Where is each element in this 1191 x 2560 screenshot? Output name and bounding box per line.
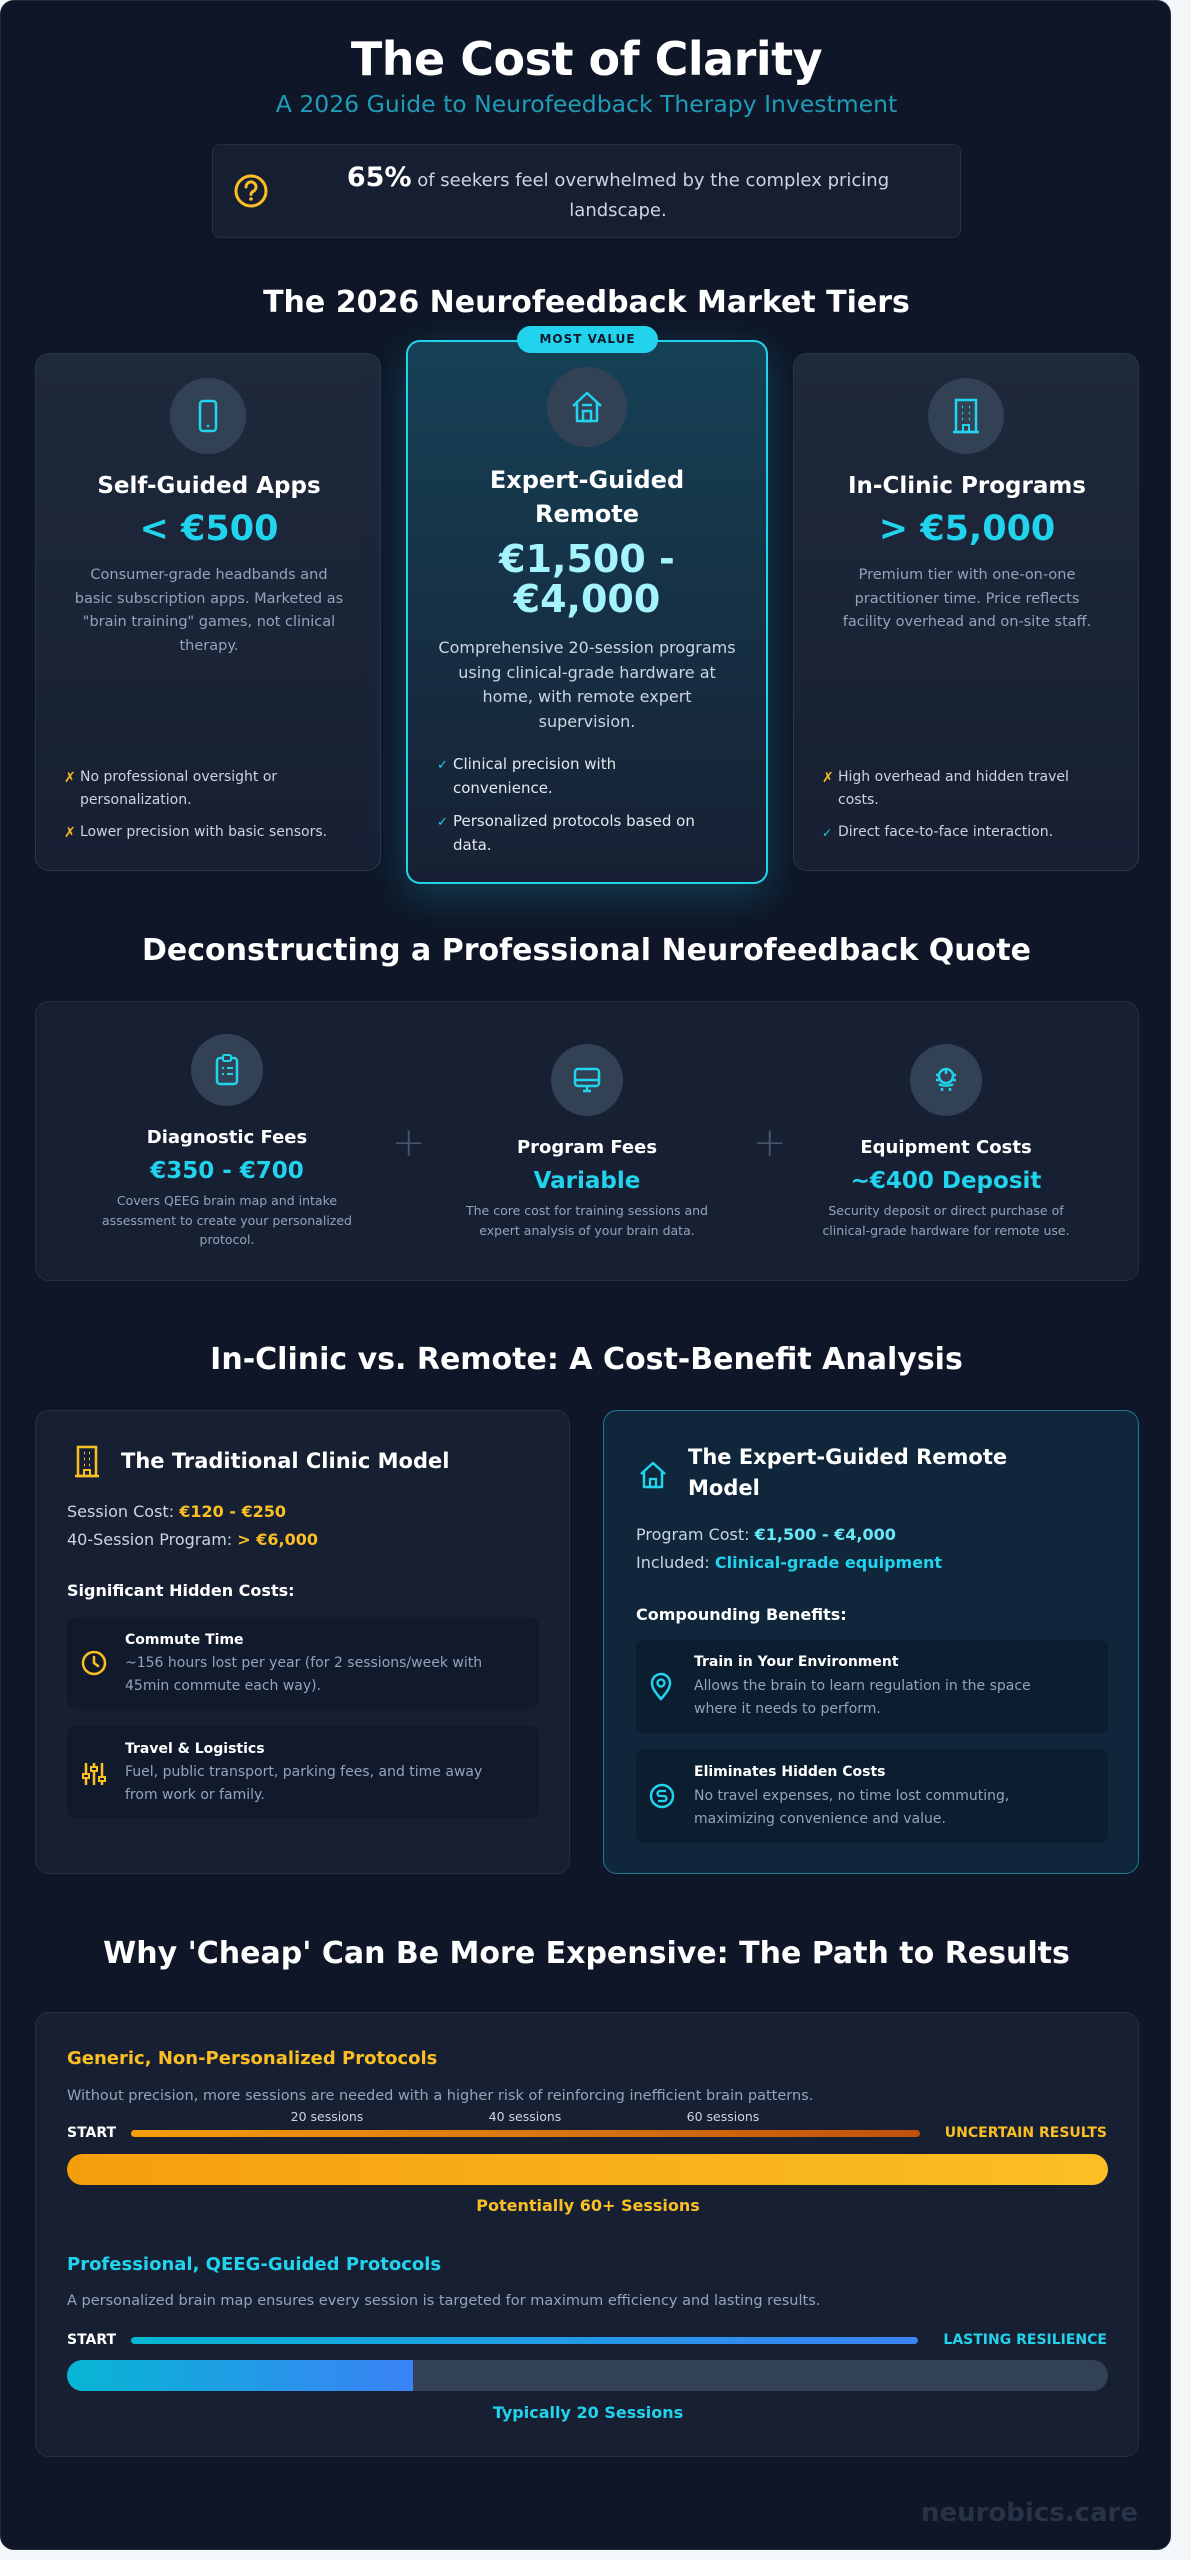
panel: traditional clinic <box>35 1410 570 1874</box>
cost lines <box>636 1525 942 1572</box>
cost lines: 40-Session Program: > €6,000 <box>67 1530 318 1549</box>
panel: path comparison: A personalized brain map ensures every session is targeted for maximum efficiency and lasting results. <box>67 2293 820 2309</box>
item: travel & logistics: Fuel, public transport, parking fees, and time away <box>125 1764 482 1780</box>
column: program fees: Variable <box>534 1168 640 1194</box>
icon: monitor <box>551 1044 623 1116</box>
column: program fees <box>466 1044 708 1238</box>
session markers: 20 sessions <box>291 2109 363 2124</box>
description: using clinical-grade hardware at <box>458 663 716 682</box>
bullets: ✗ <box>64 825 76 841</box>
cost lines: Program Cost: €1,500 - €4,000 <box>636 1525 896 1544</box>
column: equipment costs: Security deposit or direct purchase of <box>828 1203 1064 1218</box>
column: diagnostic fees: Diagnostic Fees <box>147 1127 307 1148</box>
item: commute time: ~156 hours lost per year (for 2 sessions/week with <box>125 1655 482 1671</box>
cost lines <box>67 1502 318 1549</box>
column: diagnostic fees <box>102 1034 352 1247</box>
icon: phone <box>170 378 246 454</box>
heading: market tiers: The 2026 Neurofeedback Market Tiers <box>263 285 910 320</box>
bullets: convenience. <box>453 779 553 797</box>
professional protocols: Professional, QEEG-Guided Protocols <box>67 2254 441 2275</box>
price: > €5,000 <box>879 509 1055 549</box>
icon: building yellow <box>75 1446 99 1478</box>
column: diagnostic fees: assessment to create your personalized <box>102 1212 352 1228</box>
description: Consumer-grade headbands and <box>90 567 328 583</box>
column: equipment costs <box>822 1044 1070 1238</box>
item: train in environment: where it needs to perform. <box>694 1701 881 1717</box>
description <box>75 567 343 654</box>
icon: headset <box>910 1044 982 1116</box>
price: €1,500 - <box>499 537 675 581</box>
bar: 60+ sessions <box>67 2154 1108 2185</box>
panel: path comparison <box>35 2012 1139 2457</box>
heading: The Expert-Guided Remote <box>688 1445 1007 1469</box>
card title: Expert-Guided <box>490 466 684 494</box>
cost lines: Session Cost: €120 - €250 <box>67 1502 286 1521</box>
bullets: Clinical precision with <box>453 755 616 773</box>
item: eliminates hidden costs: No travel expenses, no time lost commuting, <box>694 1788 1009 1804</box>
subtitle: A 2026 Guide to Neurofeedback Therapy Investment <box>276 90 897 118</box>
heading: The Traditional Clinic Model <box>121 1449 449 1473</box>
description: Premium tier with one-on-one <box>859 567 1075 583</box>
cost lines: Included: Clinical-grade equipment <box>636 1553 942 1572</box>
bullets: ✗ <box>822 770 834 786</box>
panel: in-clinic programs <box>793 353 1139 871</box>
icon: clipboard <box>191 1034 263 1106</box>
timeline: professional: START <box>67 2332 116 2348</box>
bullets: Direct face-to-face interaction. <box>838 824 1053 840</box>
column: diagnostic fees: protocol. <box>200 1232 254 1247</box>
icon: house <box>640 1462 666 1488</box>
description: Comprehensive 20-session programs <box>438 638 736 657</box>
bullets: personalization. <box>80 792 192 808</box>
bullets <box>822 769 1069 840</box>
description: basic subscription apps. Marketed as <box>75 590 343 606</box>
column: diagnostic fees: €350 - €700 <box>150 1158 304 1184</box>
item: commute time: Commute Time <box>125 1632 244 1648</box>
bullets: No professional oversight or <box>80 769 277 785</box>
generic protocols: Generic, Non-Personalized Protocols <box>67 2048 437 2069</box>
stat callout <box>212 144 961 238</box>
title: The Cost of Clarity <box>351 32 822 86</box>
item: eliminates hidden costs <box>636 1749 1108 1843</box>
column: program fees: expert analysis of your brain data. <box>479 1222 695 1238</box>
item: commute time <box>67 1617 539 1709</box>
card title: Remote <box>535 500 639 528</box>
heading: Model <box>688 1476 760 1500</box>
card title: In-Clinic Programs <box>848 473 1086 499</box>
bullets: Lower precision with basic sensors. <box>80 824 327 840</box>
description: "brain training" games, not clinical <box>83 614 335 630</box>
column: equipment costs: clinical-grade hardware for remote use. <box>822 1222 1070 1238</box>
bullets <box>437 755 695 854</box>
price: €4,000 <box>514 577 660 621</box>
timeline: generic: START <box>67 2125 116 2141</box>
stat text: landscape. <box>569 200 667 221</box>
bar: 20 sessions <box>67 2360 1108 2391</box>
subheading: Significant Hidden Costs: <box>67 1581 295 1600</box>
description: home, with remote expert <box>482 687 692 706</box>
price: < €500 <box>140 509 278 549</box>
panel: path comparison: UNCERTAIN RESULTS <box>945 2125 1107 2141</box>
subheading: Compounding Benefits: <box>636 1605 847 1624</box>
panel: quote breakdown <box>35 1001 1139 1281</box>
icon: question <box>234 174 268 208</box>
bullets: ✓ <box>437 815 448 830</box>
bullets: data. <box>453 836 492 854</box>
plus sign: + <box>392 1120 426 1166</box>
plus sign: + <box>753 1120 787 1166</box>
description <box>438 638 736 731</box>
column: equipment costs: ~€400 Deposit <box>851 1168 1041 1194</box>
badge: most value <box>517 326 658 353</box>
description <box>843 567 1091 630</box>
bullets: ✓ <box>437 758 448 773</box>
panel: expert-guided remote <box>406 340 768 884</box>
column: program fees: Program Fees <box>517 1137 657 1158</box>
item: travel & logistics: from work or family. <box>125 1787 265 1803</box>
description: therapy. <box>180 638 238 654</box>
panel: path comparison: Without precision, more sessions are needed with a higher risk of reinforcing inefficient brain patterns. <box>67 2088 813 2104</box>
price <box>498 537 675 621</box>
panel: path comparison: Typically 20 Sessions <box>493 2403 683 2422</box>
item: eliminates hidden costs: Eliminates Hidden Costs <box>694 1764 886 1780</box>
item: travel & logistics: Travel & Logistics <box>125 1741 265 1757</box>
footer brand: neurobics.care <box>921 2498 1138 2528</box>
stat text: 65% of seekers feel overwhelmed by the complex pricing <box>347 162 889 193</box>
bullets: ✓ <box>822 826 832 840</box>
item: commute time: 45min commute each way). <box>125 1678 321 1694</box>
item: travel & logistics <box>67 1726 539 1818</box>
item: train in environment: Train in Your Environment <box>694 1654 899 1670</box>
column: diagnostic fees: Covers QEEG brain map and intake <box>117 1193 337 1208</box>
badge: most value: MOST VALUE <box>539 332 636 346</box>
panel: path comparison: 40 sessions <box>489 2109 561 2124</box>
item: eliminates hidden costs: maximizing convenience and value. <box>694 1811 946 1827</box>
panel: path comparison: 60 sessions <box>687 2109 759 2124</box>
item: train in environment: Allows the brain to learn regulation in the space <box>694 1678 1031 1694</box>
description: supervision. <box>539 712 635 731</box>
panel: self-guided apps <box>35 353 381 871</box>
column: equipment costs: Equipment Costs <box>860 1137 1032 1158</box>
heading: path to results: Why 'Cheap' Can Be More Expensive: The Path to Results <box>103 1936 1070 1971</box>
card title: Self-Guided Apps <box>97 473 321 499</box>
panel: path comparison: LASTING RESILIENCE <box>943 2332 1107 2348</box>
bullets <box>64 769 327 841</box>
bullets: ✗ <box>64 770 76 786</box>
heading <box>688 1445 1007 1500</box>
column: program fees: The core cost for training sessions and <box>466 1203 708 1218</box>
icon: building <box>928 378 1004 454</box>
description: practitioner time. Price reflects <box>855 590 1079 606</box>
heading: deconstructing quote: Deconstructing a Professional Neurofeedback Quote <box>142 933 1031 968</box>
bullets: High overhead and hidden travel <box>838 769 1069 785</box>
stat text <box>347 162 889 221</box>
heading: cost-benefit: In-Clinic vs. Remote: A Cost-Benefit Analysis <box>210 1342 963 1377</box>
bullets: Personalized protocols based on <box>453 812 695 830</box>
icon: house <box>547 367 627 447</box>
panel: expert-guided remote model <box>603 1410 1139 1874</box>
card title <box>490 466 684 528</box>
description: facility overhead and on-site staff. <box>843 614 1091 630</box>
bullets: costs. <box>838 792 879 808</box>
item: train in environment <box>636 1640 1108 1733</box>
panel: path comparison: Potentially 60+ Sessions <box>476 2196 700 2215</box>
